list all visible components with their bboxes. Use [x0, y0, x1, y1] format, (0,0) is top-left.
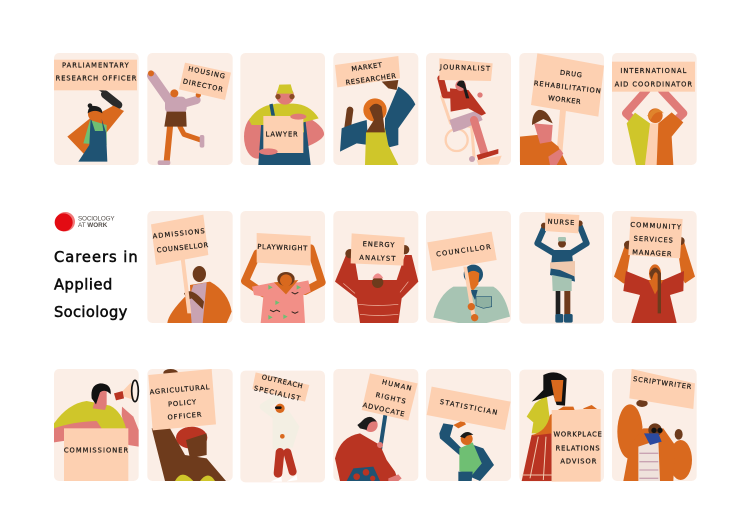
- card: human rights advocate: [333, 369, 418, 481]
- card: community services manager: [612, 211, 697, 323]
- sign: [629, 369, 695, 409]
- label: COMMUNITY: [630, 221, 682, 231]
- label: RELATIONS: [556, 444, 600, 452]
- card: nurse: [519, 212, 604, 324]
- sign: [427, 232, 497, 271]
- hands: [468, 303, 478, 321]
- card: energy analyst: [333, 211, 418, 323]
- card: councillor: [426, 211, 511, 323]
- card: workplace relations advisor: [519, 370, 604, 482]
- figure: [340, 80, 415, 165]
- sign: [148, 369, 216, 430]
- label: OFFICER: [167, 411, 202, 422]
- figure: [537, 220, 587, 323]
- label: ADMISSIONS: [152, 227, 205, 240]
- label: AID COORDINATOR: [615, 81, 692, 89]
- figure: [148, 70, 204, 165]
- sign: [151, 215, 208, 265]
- label: ANALYST: [359, 254, 396, 263]
- card: housing director: [147, 53, 233, 165]
- label: NURSE: [547, 218, 574, 227]
- sign: [439, 58, 493, 81]
- figure: [244, 84, 324, 165]
- label: [253, 372, 305, 403]
- sign: [252, 372, 309, 402]
- pole: [556, 110, 566, 165]
- label: SERVICES: [633, 235, 673, 245]
- card: commissioner: [54, 369, 139, 481]
- label: [629, 221, 682, 259]
- figure: [520, 110, 567, 165]
- pole: [181, 258, 191, 313]
- sign: [64, 428, 128, 481]
- sign: [531, 53, 604, 117]
- card: scriptwriter: [612, 369, 697, 481]
- sign: [335, 56, 400, 87]
- figure: [626, 90, 683, 165]
- sign: [552, 409, 601, 482]
- label: HUMAN: [381, 378, 412, 393]
- label: COMMISSIONER: [64, 447, 129, 455]
- figure: [152, 369, 226, 481]
- label: OUTREACH: [261, 373, 303, 390]
- pole: [463, 267, 475, 315]
- label: WORKER: [548, 94, 581, 106]
- title: Careers in Applied Sociology: Careers in: [54, 249, 138, 266]
- hands: [259, 114, 306, 155]
- pole: [378, 415, 387, 452]
- card: market researcher: [333, 53, 418, 165]
- label: ADVOCATE: [362, 401, 405, 418]
- label: [152, 227, 209, 255]
- label: INTERNATIONAL: [620, 67, 687, 75]
- label: [359, 240, 397, 263]
- card: lawyer: [240, 53, 325, 165]
- sign: [427, 387, 511, 430]
- logo text: WORK: [87, 222, 108, 229]
- card: statistician: [426, 369, 511, 481]
- label: DRUG: [559, 69, 582, 79]
- label: RIGHTS: [375, 391, 406, 406]
- label: STATISTICIAN: [439, 398, 498, 417]
- card: agricultural policy officer: [147, 369, 233, 481]
- sign: [612, 62, 695, 92]
- figure: [439, 420, 494, 481]
- label: AGRICULTURAL: [149, 383, 210, 396]
- sign: [628, 217, 683, 258]
- card: admissions counsellor: [147, 211, 233, 323]
- label: MANAGER: [632, 248, 672, 258]
- figure: [335, 245, 418, 323]
- label: HOUSING: [187, 65, 226, 81]
- figure: [263, 398, 299, 482]
- figure: [245, 248, 322, 323]
- sign: [257, 233, 311, 266]
- label: PLAYWRIGHT: [257, 243, 308, 253]
- sign: [54, 60, 137, 90]
- logo text: AT: [78, 222, 87, 229]
- label: COUNCILLOR: [436, 243, 492, 258]
- sign: [545, 213, 579, 233]
- label: COUNSELLOR: [156, 241, 209, 254]
- figure: [433, 265, 510, 323]
- figure: [617, 400, 692, 481]
- label: [362, 375, 412, 419]
- card: international aid coordinator: [612, 53, 697, 165]
- title: Careers in Applied Sociology: Applied: [54, 276, 112, 293]
- label: SCRIPTWRITER: [633, 375, 692, 391]
- label: [182, 64, 227, 94]
- logo: Sociology at Work: [55, 212, 115, 231]
- figure: [441, 78, 502, 165]
- label: RESEARCH OFFICER: [56, 74, 137, 82]
- label: POLICY: [168, 398, 197, 409]
- label: [343, 59, 397, 87]
- figure: [54, 380, 139, 447]
- sign: [263, 116, 303, 153]
- label: ADVISOR: [560, 458, 597, 466]
- label: REHABILITATION: [533, 79, 601, 95]
- sign: [351, 233, 405, 266]
- icon: red circle: [55, 212, 75, 231]
- figure: [167, 266, 232, 323]
- figure: [67, 88, 124, 162]
- title: Careers in Applied Sociology: [54, 249, 138, 321]
- card: drug rehabilitation worker: [519, 53, 604, 165]
- logo text: SOCIOLOGY: [78, 215, 115, 222]
- sign: [179, 63, 231, 100]
- label: [149, 383, 212, 423]
- card: journalist: [426, 53, 511, 165]
- figure: [335, 417, 402, 481]
- label: WORKPLACE: [553, 431, 602, 439]
- label: JOURNALIST: [439, 63, 491, 73]
- figure: [522, 372, 600, 481]
- figure: [614, 237, 695, 323]
- label: ENERGY: [363, 240, 395, 249]
- label: LAWYER: [266, 131, 298, 139]
- label: DIRECTOR: [182, 77, 224, 94]
- label: PARLIAMENTARY: [62, 62, 130, 70]
- card: playwright: [240, 211, 325, 323]
- label: SPECIALIST: [253, 384, 302, 403]
- label: MARKET: [351, 61, 383, 73]
- sign: [362, 373, 418, 421]
- card: parliamentary research officer: [54, 53, 139, 165]
- title: Careers in Applied Sociology: Sociology: [54, 304, 128, 321]
- label: RESEARCHER: [345, 72, 397, 87]
- card: outreach specialist: [240, 371, 325, 482]
- label: [532, 66, 603, 108]
